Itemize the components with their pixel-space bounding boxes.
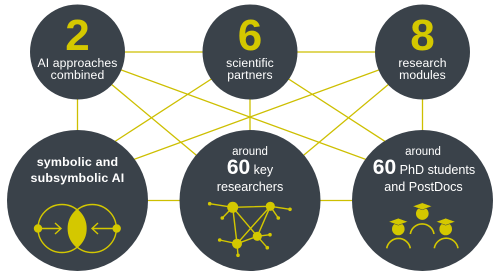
label: around: around xyxy=(232,146,268,158)
panel: around 60 key researchers xyxy=(180,130,320,271)
number 6: 6 xyxy=(238,11,262,60)
connection lines between circles xyxy=(77,52,423,200)
label: research modules: research xyxy=(398,56,447,70)
label: AI approaches combined: combined xyxy=(51,68,104,82)
panel: around 60 PhD students and PostDocs xyxy=(352,130,493,271)
label: AI approaches combined: AI approaches xyxy=(38,56,117,70)
label: scientific partners: partners xyxy=(227,68,273,82)
icon: overlapping circles with arrows xyxy=(34,204,121,252)
label: around: around xyxy=(405,146,441,158)
icon: network xyxy=(208,202,292,257)
label: scientific partners: scientific xyxy=(226,56,274,70)
label: researchers: researchers xyxy=(217,180,283,194)
panel: symbolic and subsymbolic AI xyxy=(7,130,148,271)
number 60 with PhD students: 60 PhD students xyxy=(373,156,475,179)
number 2: 2 xyxy=(65,11,90,60)
panel: 6 scientific partners xyxy=(202,4,298,100)
heading: symbolic and subsymbolic AI: subsymbolic AI xyxy=(31,171,124,185)
panel: 2 AI approaches combined xyxy=(30,4,125,100)
panel: 8 research modules xyxy=(375,4,470,100)
number 60 with key: 60 key xyxy=(227,156,274,179)
label: research modules: modules xyxy=(399,68,446,82)
number 8: 8 xyxy=(410,11,435,60)
heading: symbolic and subsymbolic AI: symbolic and xyxy=(37,155,118,169)
label: and PostDocs: and PostDocs xyxy=(384,180,463,194)
icon: graduates xyxy=(387,203,458,248)
